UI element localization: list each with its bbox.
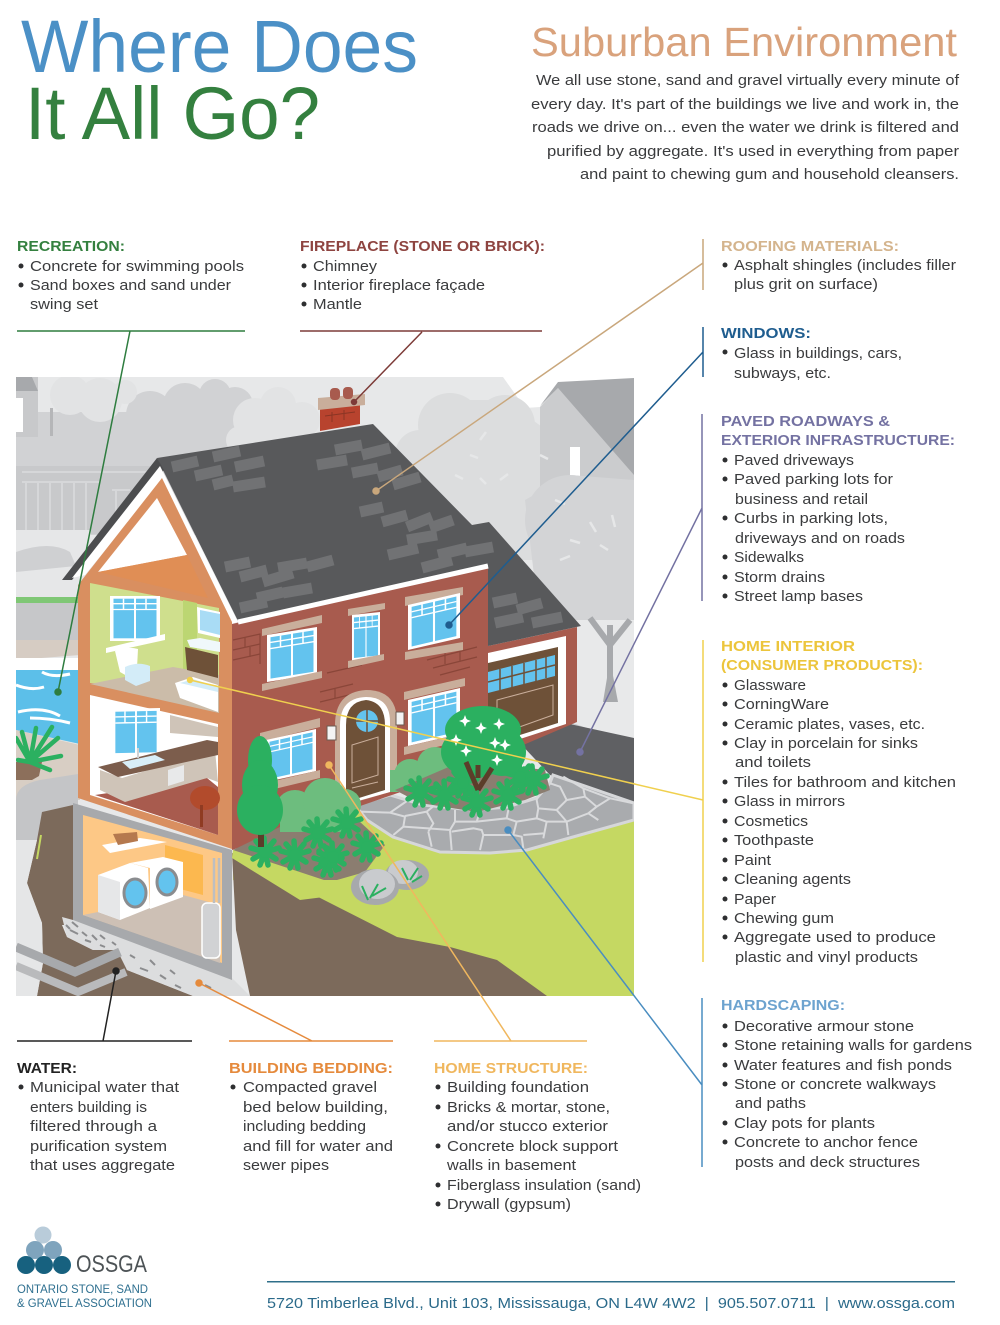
brick house wall [232,566,577,850]
panel: recreation: swing set [30,297,98,313]
panel: home interior: CorningWare [734,697,829,713]
garage door [488,636,566,748]
bathroom fixtures [115,638,220,712]
background: grey neighbourhood [16,375,642,996]
panel: home structure: Building foundation [447,1080,589,1096]
panel: home interior: Cleaning agents [734,872,851,888]
cutaway windows [106,596,220,756]
heading: Suburban Environment: Suburban Environment [531,19,958,65]
intro paragraph [531,72,960,183]
panel: home structure: Drywall (gypsum) [447,1197,571,1213]
logo: OSSGA [17,1226,152,1310]
panel: home structure: and/or stucco exterior [447,1119,608,1135]
upper and lower house windows [260,587,465,792]
panel: paved roadways: business and retail [735,492,868,508]
panel: roofing materials [721,239,956,293]
panel: hardscaping: Water features and fish ponds [734,1058,952,1074]
evergreen tree [237,736,283,847]
panel: recreation: Sand boxes and sand under [30,278,231,294]
stone walkway [355,775,634,853]
panel: roofing materials: ROOFING MATERIALS: [721,239,899,255]
leader: hardscaping [505,827,702,1167]
panel: hardscaping: and paths [735,1096,806,1112]
panel: building bedding: sewer pipes [243,1158,329,1174]
panel: hardscaping [721,998,972,1171]
intro paragraph: every day. It's part of the buildings we live and work in, the [531,96,959,113]
kitchen [98,715,218,802]
driveway [517,723,634,803]
panel: building bedding: and fill for water and [243,1139,393,1155]
garden beds and shrubs [232,747,550,900]
panel: water: that uses aggregate [30,1158,175,1174]
panel: paved roadways: Storm drains [734,570,825,586]
panel: paved roadways: Paved parking lots for [734,472,893,488]
panel: building bedding: Compacted gravel [243,1080,377,1096]
leader: recreation [17,331,245,695]
panel: paved roadways: EXTERIOR INFRASTRUCTURE: [721,433,955,449]
leader: building bedding [196,980,393,1041]
title: It All Go? [25,72,320,155]
panel: home interior: Paint [734,853,771,869]
panel: home structure: Fiberglass insulation (sand) [447,1178,641,1194]
panel: home interior: Paper [734,892,776,908]
title: Where Does [21,5,418,88]
footer: contact details: 5720 Timberlea Blvd., Unit 103, Mississauga, ON L4W 4W2 | 905.507.0711 | www.ossga.com [267,1296,955,1312]
panel: hardscaping: Stone retaining walls for gardens [734,1038,972,1054]
intro paragraph: purified by aggregate. It's used in everything from paper [547,143,959,160]
panel: building bedding [229,1061,393,1174]
leader: home structure [326,762,587,1041]
panel: building bedding: BUILDING BEDDING: [229,1061,393,1077]
panel: building bedding: including bedding [243,1119,366,1135]
panel: home interior: Chewing gum [734,911,834,927]
logo: OSSGA: OSSGA [76,1251,147,1278]
panel: paved roadways: Sidewalks [734,550,804,566]
panel: hardscaping: Stone or concrete walkways [734,1077,936,1093]
panel: roofing materials: plus grit on surface) [734,277,878,293]
panel: paved roadways: Curbs in parking lots, [734,511,888,527]
leader: home interior [188,640,703,962]
panel: windows: Glass in buildings, cars, [734,346,902,362]
panel: home interior [721,639,956,966]
panel: home interior: Glass in mirrors [734,794,845,810]
panel: home structure: Bricks & mortar, stone, [447,1100,610,1116]
panel: fireplace: Mantle [313,297,362,313]
panel: home structure: walls in basement [446,1158,576,1174]
panel: paved roadways: Street lamp bases [734,589,863,605]
right ground: lawn, dirt [232,807,634,996]
panel: paved roadways: Paved driveways [734,453,854,469]
panel: fireplace: Interior fireplace façade [313,278,485,294]
panel: paved roadways: driveways and on roads [735,531,905,547]
logo: OSSGA: ONTARIO STONE, SAND [17,1284,148,1296]
title [21,5,418,155]
leader: water [17,968,192,1041]
basement [73,803,232,980]
panel: hardscaping: Decorative armour stone [734,1019,914,1035]
leader lines [17,239,703,1167]
panel: fireplace: FIREPLACE (STONE OR BRICK): [300,239,545,255]
panel: home structure: HOME STRUCTURE: [434,1061,588,1077]
panel: water [17,1061,179,1174]
panel: water: Municipal water that [30,1080,179,1096]
panel: recreation: RECREATION: [17,239,125,255]
logo: OSSGA: & GRAVEL ASSOCIATION [17,1298,152,1310]
panel: home interior: and toilets [735,755,811,771]
panel: roofing materials: Asphalt shingles (includes filler [734,258,956,274]
leader: windows [446,327,703,628]
panel: windows: subways, etc. [734,366,831,382]
panel: home interior: HOME INTERIOR [721,639,856,655]
panel: water: enters building is [30,1100,147,1116]
garden rocks [351,860,429,905]
panel: home interior: plastic and vinyl products [735,950,918,966]
panel: windows [721,326,902,382]
panel: home interior: Clay in porcelain for sinks [734,736,918,752]
panel: home interior: Ceramic plates, vases, etc. [734,717,925,733]
panel: home structure [434,1061,641,1213]
panel: fireplace [300,239,545,313]
panel: water: filtered through a [30,1119,158,1135]
panel: windows: WINDOWS: [721,326,811,342]
leader: fireplace [300,331,542,404]
panel: paved roadways: PAVED ROADWAYS & [721,414,891,430]
cutaway: gable and rooms [62,458,238,849]
panel: paved roadways [721,414,955,605]
panel: home structure: Concrete block support [447,1139,618,1155]
front door [327,690,404,808]
panel: water: purification system [30,1139,167,1155]
panel: home interior: Toothpaste [734,833,814,849]
panel: home interior: (CONSUMER PRODUCTS): [721,658,923,674]
chimney [318,387,365,431]
intro paragraph: We all use stone, sand and gravel virtually every minute of [536,72,960,89]
intro paragraph: and paint to chewing gum and household cleansers. [580,166,959,183]
panel: hardscaping: Clay pots for plants [734,1116,875,1132]
panel: water: WATER: [17,1061,77,1077]
panel: hardscaping: HARDSCAPING: [721,998,845,1014]
house illustration [16,375,642,996]
panel: recreation: Concrete for swimming pools [30,259,244,275]
panel: home interior: Tiles for bathroom and kitchen [734,775,956,791]
panel: fireplace: Chimney [313,259,378,275]
panel: recreation [17,239,244,313]
panel: hardscaping: Concrete to anchor fence [734,1135,918,1151]
panel: home interior: Aggregate used to produce [734,930,936,946]
pool and left yard [16,670,250,996]
main roof [157,424,581,646]
flowering shrub [441,706,526,790]
panel: hardscaping: posts and deck structures [735,1155,920,1171]
leader: roofing [373,239,703,494]
leader: paved roadways [577,414,702,755]
panel: home interior: Glassware [734,678,806,694]
panel: home interior: Cosmetics [734,814,808,830]
intro paragraph: roads we drive on... even the water we drink is filtered and [532,119,959,136]
panel: building bedding: bed below building, [243,1100,388,1116]
